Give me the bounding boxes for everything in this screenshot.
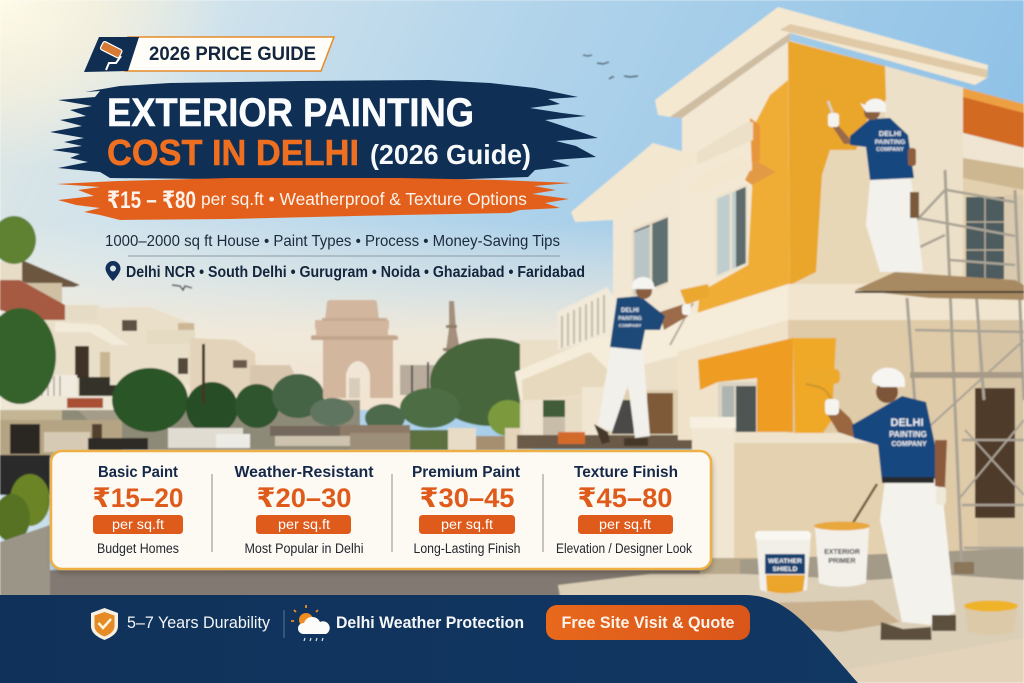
scaffolding [855,170,1024,574]
tier: texture finish: per sq.ft [599,517,651,532]
tier: basic paint: per sq.ft [112,517,164,532]
left houses [0,260,360,458]
Qutub Minar tower [443,301,461,388]
call-to-action button [546,605,750,640]
painter at ground level: COMPANY [891,441,927,448]
navy brush stroke banner [50,80,598,180]
tier: weather-resistant [234,464,374,556]
paint buckets and tray [755,484,1018,635]
price range subtitle: ₹15 – ₹80 [107,187,196,214]
icon: sun and rain cloud [291,605,330,641]
painter on balcony: PAINTING [618,316,642,322]
tier: premium paint: per sq.ft [441,517,493,532]
tier: basic paint: Basic Paint [98,464,178,481]
badge: 2026 price guide [84,37,334,72]
India Gate monument [311,300,398,398]
badge: 2026 price guide: 2026 PRICE GUIDE [149,44,316,65]
tier: weather-resistant: Weather-Resistant [234,464,374,481]
painter on scaffold: PAINTING [875,139,905,146]
painter on scaffold: DELHI [879,129,901,138]
price range subtitle: per sq.ft • Weatherproof & Texture Options [201,189,527,209]
tier: premium paint: Long-Lasting Finish [414,541,520,556]
icon: paint roller [84,37,139,72]
tier: texture finish: Texture Finish [574,464,678,481]
mid-ground trees and low wall [340,338,550,450]
tier: premium paint: ₹30–45 [420,483,514,513]
building: lower storey [678,284,1024,575]
windows on upper storey [633,185,747,297]
price card panel [51,451,712,573]
icon: location pin [106,261,120,281]
window canopies [571,122,753,222]
painter at ground level: PAINTING [889,430,927,439]
durability feature: 5–7 Years Durability [127,613,270,632]
icon: shield [91,608,118,640]
tier: basic paint: ₹15–20 [92,483,184,513]
paint buckets and tray: SHIELD [773,566,798,573]
drop cloth and ground [558,548,1024,683]
tier: texture finish [556,464,692,556]
painter on scaffold [808,84,923,272]
tier: weather-resistant: Most Popular in Delhi [244,541,364,556]
painter on balcony: DELHI [621,308,639,314]
divider rule [128,255,560,257]
paint buckets and tray: EXTERIOR [824,549,860,556]
tier: premium paint [412,464,520,556]
tier: basic paint [92,464,184,556]
orange brush stroke banner [56,178,571,220]
building: upper storey [613,40,1024,350]
tier: premium paint: Premium Paint [412,464,520,481]
paint buckets and tray: PRIMER [828,558,856,565]
painter at ground level [803,368,956,640]
title [107,91,531,173]
painter on balcony: COMPANY [619,323,641,328]
painted orange wall [697,41,886,318]
topics line: 1000–2000 sq ft House • Paint Types • Process • Money-Saving Tips [105,233,560,250]
bottom navy band [0,595,858,683]
locations line: Delhi NCR • South Delhi • Gurugram • Noida • Ghaziabad • Faridabad [126,264,585,281]
title: (2026 Guide) [370,139,531,170]
paint buckets and tray: WEATHER [768,558,802,565]
painter on balcony [594,277,710,446]
tier: basic paint: Budget Homes [97,541,179,556]
weather protection feature: Delhi Weather Protection [336,613,524,632]
title: COST IN DELHI [107,132,359,173]
roof parapet [655,7,988,118]
call-to-action button: Free Site Visit & Quote [562,613,734,632]
balcony and ground floor porch [515,284,788,449]
title: EXTERIOR PAINTING [107,91,474,135]
tier: weather-resistant: ₹20–30 [256,483,352,513]
painter on scaffold: COMPANY [876,147,904,153]
trees on left [0,216,354,448]
lower left fence, plants and stone wall [0,455,720,596]
tier: weather-resistant: per sq.ft [278,517,330,532]
price range subtitle [107,187,527,214]
birds in sky [172,55,638,290]
tier: texture finish: Elevation / Designer Look [556,541,692,556]
weather protection feature [291,605,524,641]
tier: texture finish: ₹45–80 [578,483,672,513]
durability feature [91,608,270,640]
painter at ground level: DELHI [890,417,924,429]
